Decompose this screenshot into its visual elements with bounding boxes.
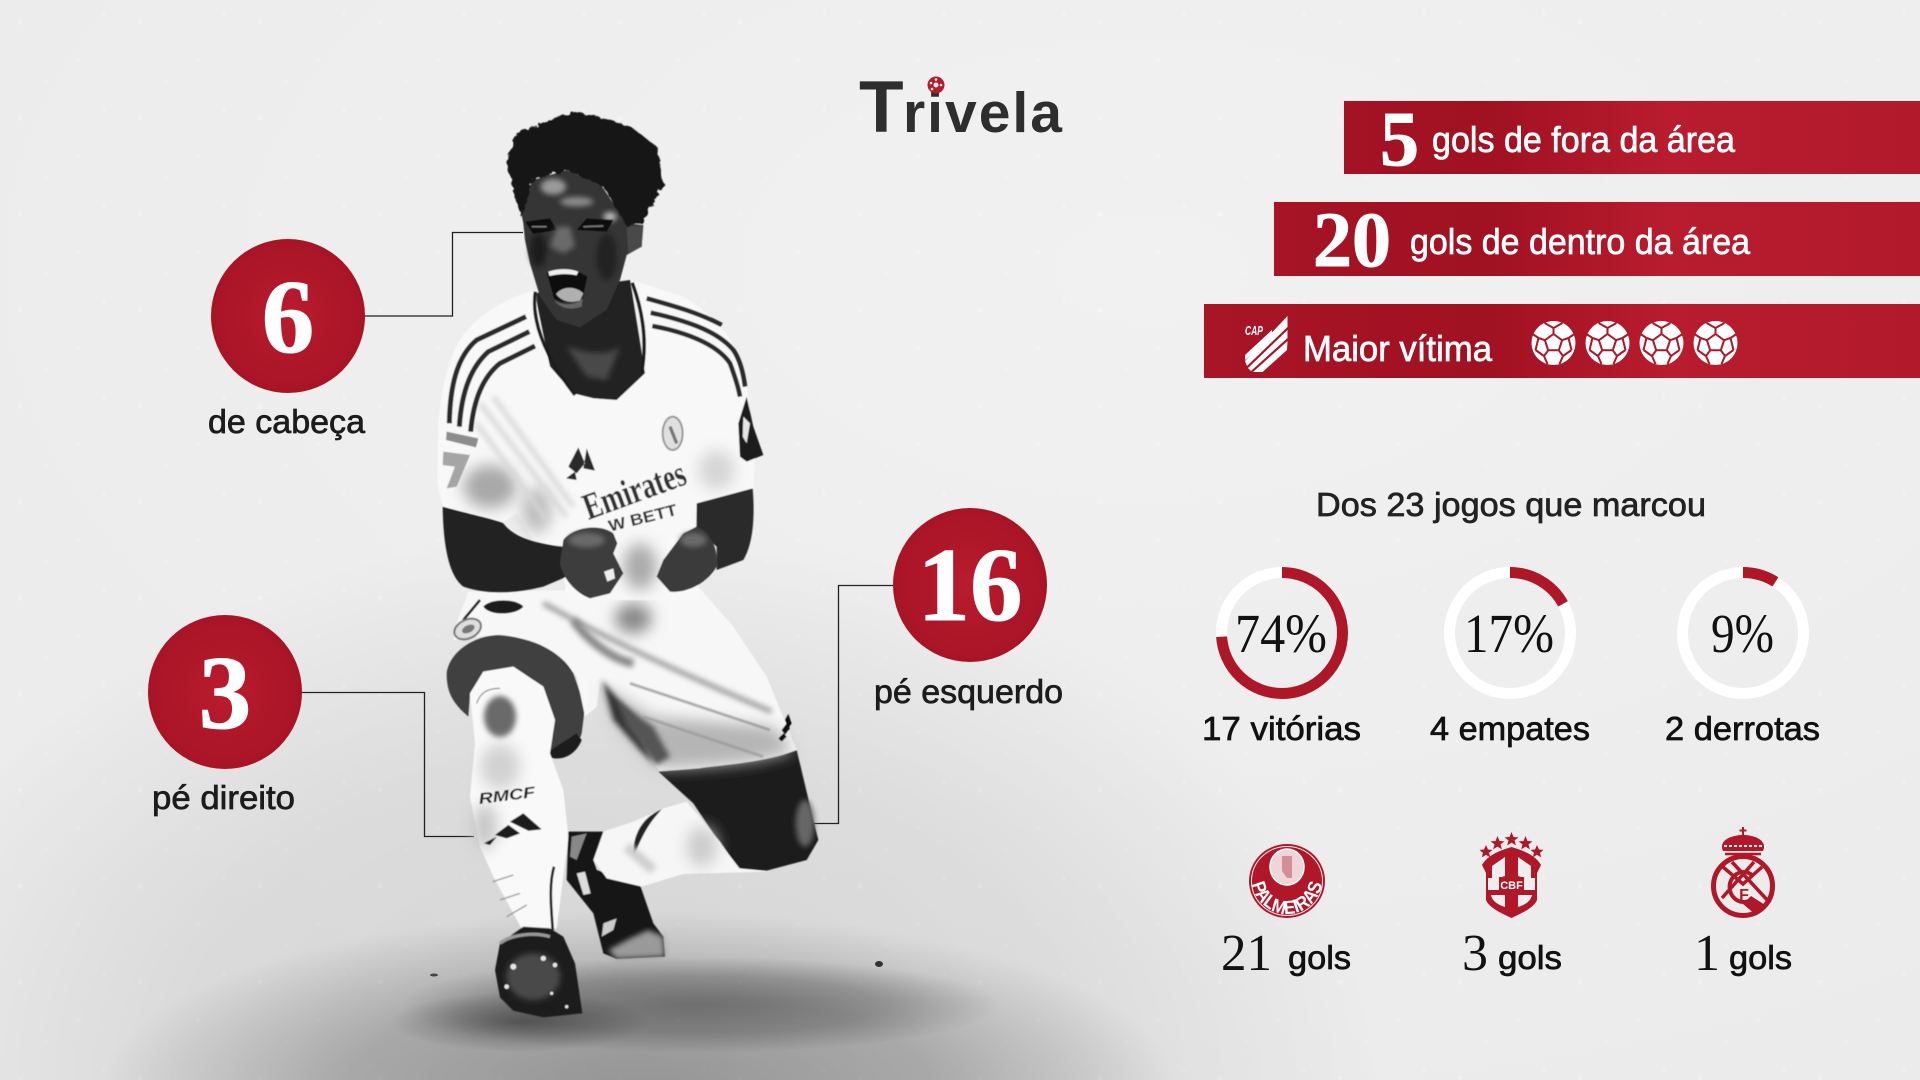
stat: pé esquerdo <box>874 508 1063 710</box>
donut: vitórias <box>1202 572 1361 747</box>
club: CBF: gols <box>1498 939 1562 976</box>
ground shadow <box>0 500 1400 1080</box>
icon: CAP crest: CAP <box>1245 324 1263 338</box>
club: Real Madrid: 1 <box>1694 925 1720 982</box>
bar: gols de dentro da área: gols de dentro da área <box>1410 221 1751 262</box>
bar: gols de dentro da área <box>1274 196 1920 283</box>
club: Real Madrid <box>1694 827 1792 982</box>
bar: gols de dentro da área: 20 <box>1313 196 1391 283</box>
crest: CBF: CBF <box>1500 880 1523 892</box>
connector: de cabeça <box>365 232 523 316</box>
crest: Real Madrid <box>1714 827 1772 916</box>
stat: pé esquerdo: 16 <box>918 526 1022 643</box>
donut: empates: 17% <box>1464 603 1554 664</box>
club: Palmeiras: 21 <box>1221 925 1272 982</box>
donut: empates <box>1430 572 1590 747</box>
stat: pé esquerdo: pé esquerdo <box>874 673 1063 710</box>
player lower body: RMCF <box>478 784 537 808</box>
bar: maior vítima <box>1204 304 1920 378</box>
stat: pé direito <box>148 615 302 816</box>
player upper body <box>437 112 763 600</box>
club: CBF <box>1462 832 1562 982</box>
icon: four balls <box>1532 321 1738 365</box>
donut: vitórias: 17 vitórias <box>1202 710 1361 747</box>
donut: derrotas: 2 derrotas <box>1665 710 1820 747</box>
crest: CBF <box>1480 832 1544 918</box>
stat: de cabeça: 6 <box>262 258 314 375</box>
logo: Trivela <box>859 67 1064 148</box>
donut: vitórias: 74% <box>1235 603 1327 664</box>
stat: de cabeça: de cabeça <box>208 403 366 440</box>
stat: pé direito: pé direito <box>152 779 295 816</box>
bar: gols de fora da área <box>1344 95 1920 182</box>
icon: CAP crest <box>1245 316 1288 372</box>
player upper body: Emirates <box>577 453 692 528</box>
icon: logo ball <box>928 76 944 94</box>
connector: pé esquerdo <box>814 586 893 824</box>
player lower body <box>447 588 818 1017</box>
club: Real Madrid: gols <box>1729 939 1792 976</box>
player upper body: W BETT <box>607 502 679 536</box>
logo: Trivela: rivela <box>903 81 1064 145</box>
donut: derrotas: 9% <box>1711 603 1774 664</box>
donut: empates: 4 empates <box>1430 710 1590 747</box>
logo: Trivela: T <box>859 67 904 148</box>
club: Palmeiras: gols <box>1288 939 1351 976</box>
stat: de cabeça <box>208 239 366 440</box>
club: Palmeiras <box>1221 844 1351 982</box>
player photo <box>437 112 818 1017</box>
bar: gols de fora da área: 5 <box>1380 95 1419 182</box>
bar: gols de fora da área: gols de fora da área <box>1432 119 1736 160</box>
connector: pé direito <box>302 692 474 836</box>
heading: jogos: Dos 23 jogos que marcou <box>1316 486 1706 523</box>
crest: Real Madrid: F <box>1739 887 1749 904</box>
bar: maior vítima: Maior vítima <box>1303 328 1493 369</box>
stat: pé direito: 3 <box>199 634 251 751</box>
club: CBF: 3 <box>1462 925 1488 982</box>
crest: Palmeiras: PALMEIRAS <box>1252 880 1322 914</box>
donut: derrotas <box>1665 572 1820 747</box>
